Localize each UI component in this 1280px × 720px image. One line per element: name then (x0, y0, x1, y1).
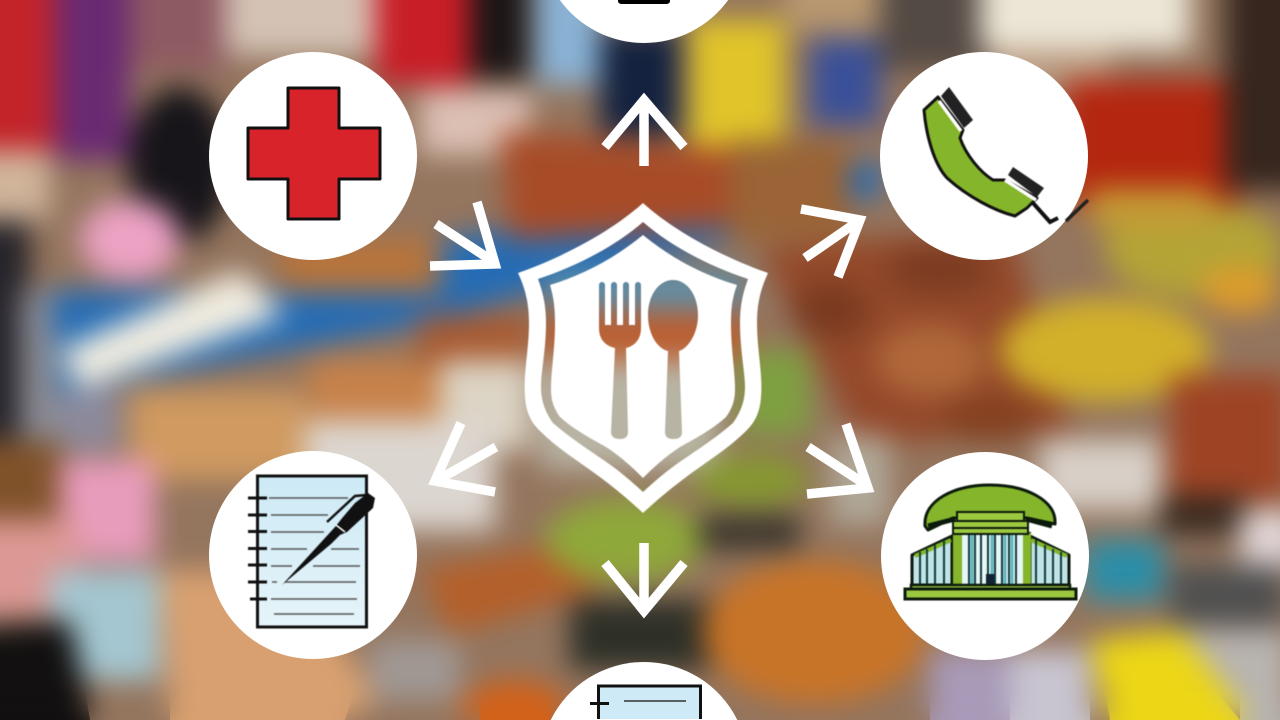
icon: top clipped black shape (618, 0, 670, 4)
circle: notebook and pen (209, 451, 417, 659)
shield outer ring (518, 203, 768, 513)
circle: phone building (881, 452, 1089, 660)
arrow: lower right (807, 424, 868, 494)
shield inner panel with fork and spoon cutouts (550, 235, 737, 478)
icon: green handset (924, 87, 1088, 222)
arrow: upper left (430, 202, 495, 266)
circle: bottom notebook (551, 662, 737, 720)
icon: pen (282, 493, 375, 585)
central shield with fork and spoon (518, 203, 768, 513)
circle: medical cross (209, 52, 417, 260)
icon: red cross (248, 88, 380, 219)
arrow: upper right (801, 209, 860, 277)
circle: top (560, 0, 728, 43)
arrow: up (605, 100, 684, 166)
icon: bottom notebook top edge (590, 686, 700, 719)
arrow: lower left (435, 423, 496, 492)
circle: telephone handset (880, 52, 1088, 260)
arrow: down (605, 543, 684, 611)
icon: green phone-shaped building (905, 485, 1076, 599)
icon: notebook (248, 476, 375, 627)
